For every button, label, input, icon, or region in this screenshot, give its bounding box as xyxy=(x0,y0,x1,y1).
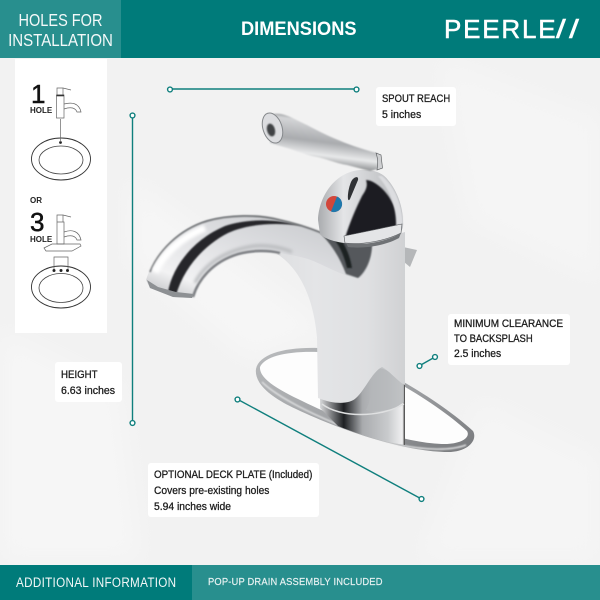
callout: optional deck plate: 5.94 inches wide xyxy=(154,501,231,513)
dome collar xyxy=(344,224,402,244)
heading: dimensions: DIMENSIONS xyxy=(241,19,357,40)
deck plate xyxy=(256,348,474,452)
spout inner rim xyxy=(193,251,280,297)
measure: deck plate line xyxy=(234,396,425,502)
spout top edge xyxy=(150,216,322,272)
header bar xyxy=(0,0,600,58)
faucet junction reflection xyxy=(320,233,372,278)
footer text: pop-up drain: POP-UP DRAIN ASSEMBLY INCLUDED xyxy=(208,576,383,588)
header tab: holes for installation: HOLES FOR xyxy=(19,10,102,30)
faucet base xyxy=(320,366,405,445)
hot and cold indicator xyxy=(326,196,342,212)
footer heading: additional information: ADDITIONAL INFORMATION xyxy=(16,575,176,590)
measure: spout reach line xyxy=(166,86,360,93)
logo: Peerless: PEERLE xyxy=(444,14,557,44)
footer heading: additional information xyxy=(0,565,192,600)
spout tip xyxy=(147,280,194,298)
label: hole: HOLE xyxy=(30,235,52,244)
callout: minimum clearance: MINIMUM CLEARANCE xyxy=(454,318,563,330)
diagram: three hole faucet and sink xyxy=(32,215,90,308)
faucet handle xyxy=(259,110,382,171)
number 1: 1 xyxy=(31,79,45,109)
spout outer shine xyxy=(155,228,205,272)
callout: minimum clearance: TO BACKSPLASH xyxy=(454,333,533,345)
dome right highlight xyxy=(378,176,403,228)
callout: optional deck plate xyxy=(148,463,319,517)
faucet dome xyxy=(318,170,403,248)
diagram: one hole faucet and sink xyxy=(31,88,91,308)
faucet lever base tail xyxy=(403,247,417,267)
callout: optional deck plate: Covers pre-existing holes xyxy=(154,485,269,497)
callout: height xyxy=(55,362,122,402)
measure: height line xyxy=(129,112,136,426)
logo: Peerless: // xyxy=(556,14,582,44)
footer bar xyxy=(0,565,600,600)
dome slash reflection xyxy=(348,177,358,200)
header tab: holes for installation: INSTALLATION xyxy=(8,30,113,50)
faucet spout xyxy=(146,215,372,298)
panel: holes for installation xyxy=(15,59,107,333)
callout: spout reach: 5 inches xyxy=(382,109,421,121)
callout: optional deck plate: OPTIONAL DECK PLATE (Included) xyxy=(154,469,312,481)
callout: minimum clearance: 2.5 inches xyxy=(454,348,501,360)
measure: clearance line xyxy=(416,354,438,370)
spout dark reflection xyxy=(168,220,302,295)
callout: height: HEIGHT xyxy=(61,369,98,381)
callout: minimum clearance xyxy=(448,314,570,365)
callout: spout reach: SPOUT REACH xyxy=(382,93,450,105)
number 3: 3 xyxy=(30,207,44,237)
label: or: OR xyxy=(30,196,42,205)
callout: spout reach xyxy=(376,87,456,126)
dome dark reflection xyxy=(345,180,398,238)
faucet body xyxy=(277,232,405,403)
header tab: holes for installation xyxy=(0,0,121,58)
callout: height: 6.63 inches xyxy=(61,385,115,397)
label: hole: HOLE xyxy=(30,106,52,115)
